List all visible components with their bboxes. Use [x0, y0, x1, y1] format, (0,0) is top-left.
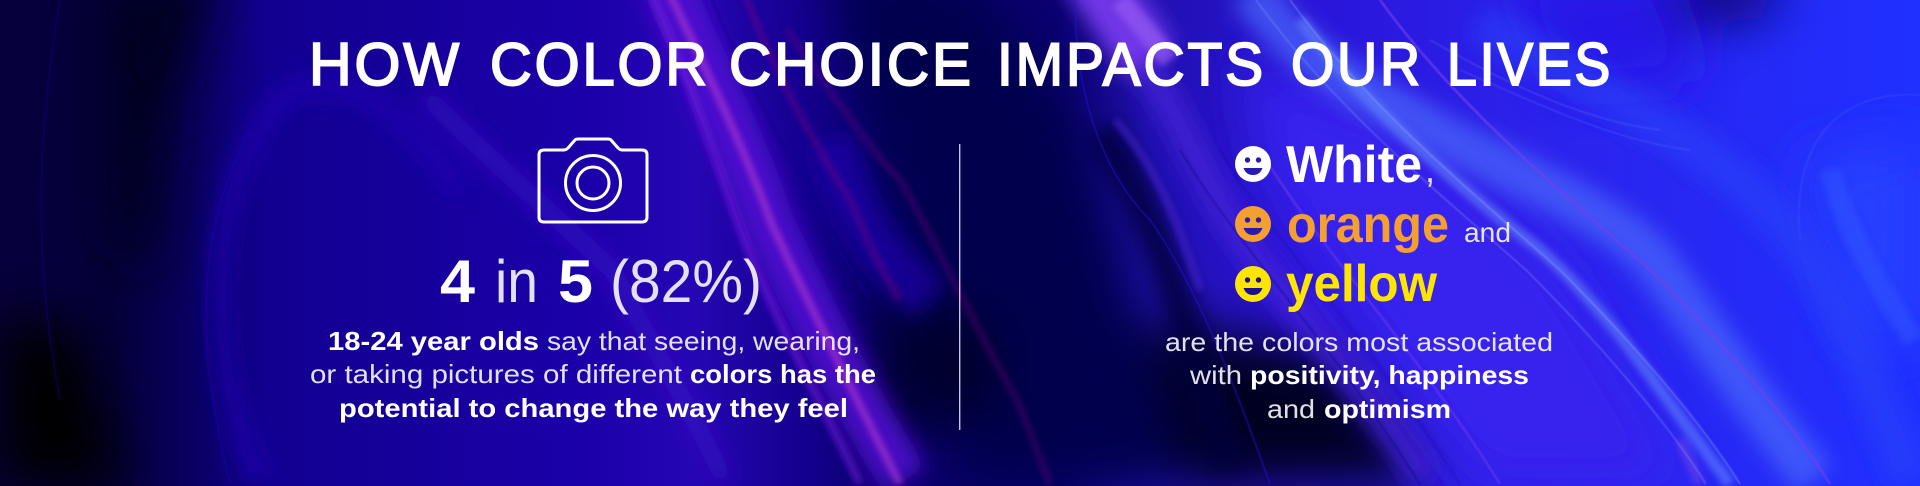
- description text: optimism: [1324, 394, 1451, 424]
- description text: are the colors most associated: [1165, 327, 1553, 357]
- title: OUR: [1291, 31, 1423, 98]
- heading: White: White: [1286, 136, 1422, 194]
- description text: with: [1189, 360, 1242, 390]
- title: LIVES: [1447, 31, 1613, 98]
- panel: camera statistic: [310, 139, 876, 423]
- comma: ,: [1425, 149, 1435, 190]
- title: COLOR: [490, 31, 710, 98]
- title: IMPACTS: [997, 31, 1266, 98]
- icon: yellow smiley: [1235, 266, 1271, 302]
- icon: orange smiley: [1235, 206, 1271, 242]
- heading: orange: orange: [1287, 196, 1449, 254]
- description text: 18-24 year olds: [328, 326, 539, 356]
- title: CHOICE: [729, 31, 974, 98]
- heading: yellow: yellow: [1286, 255, 1438, 313]
- statistic: 4 in 5 (82%): 5: [558, 248, 593, 315]
- statistic: 4 in 5 (82%): [440, 248, 762, 315]
- description text: and: [1267, 394, 1315, 424]
- description text: potential to change the way they feel: [339, 393, 848, 423]
- description text: [310, 326, 876, 423]
- title: HOW: [309, 31, 462, 98]
- divider: [959, 144, 960, 430]
- word: and: and: [1464, 217, 1511, 248]
- statistic: 4 in 5 (82%): in: [495, 248, 538, 315]
- statistic: 4 in 5 (82%): (82%): [610, 248, 762, 315]
- icon: white smiley: [1235, 146, 1271, 182]
- title: [309, 31, 1613, 98]
- description text: say that seeing, wearing,: [547, 326, 860, 356]
- description text: colors has the: [690, 359, 876, 389]
- icon: camera: [539, 139, 647, 222]
- panel: happy colors: [1165, 136, 1553, 424]
- description text: [1165, 327, 1553, 424]
- description text: positivity, happiness: [1250, 360, 1529, 390]
- description text: or taking pictures of different: [310, 359, 683, 389]
- statistic: 4 in 5 (82%): 4: [440, 248, 476, 315]
